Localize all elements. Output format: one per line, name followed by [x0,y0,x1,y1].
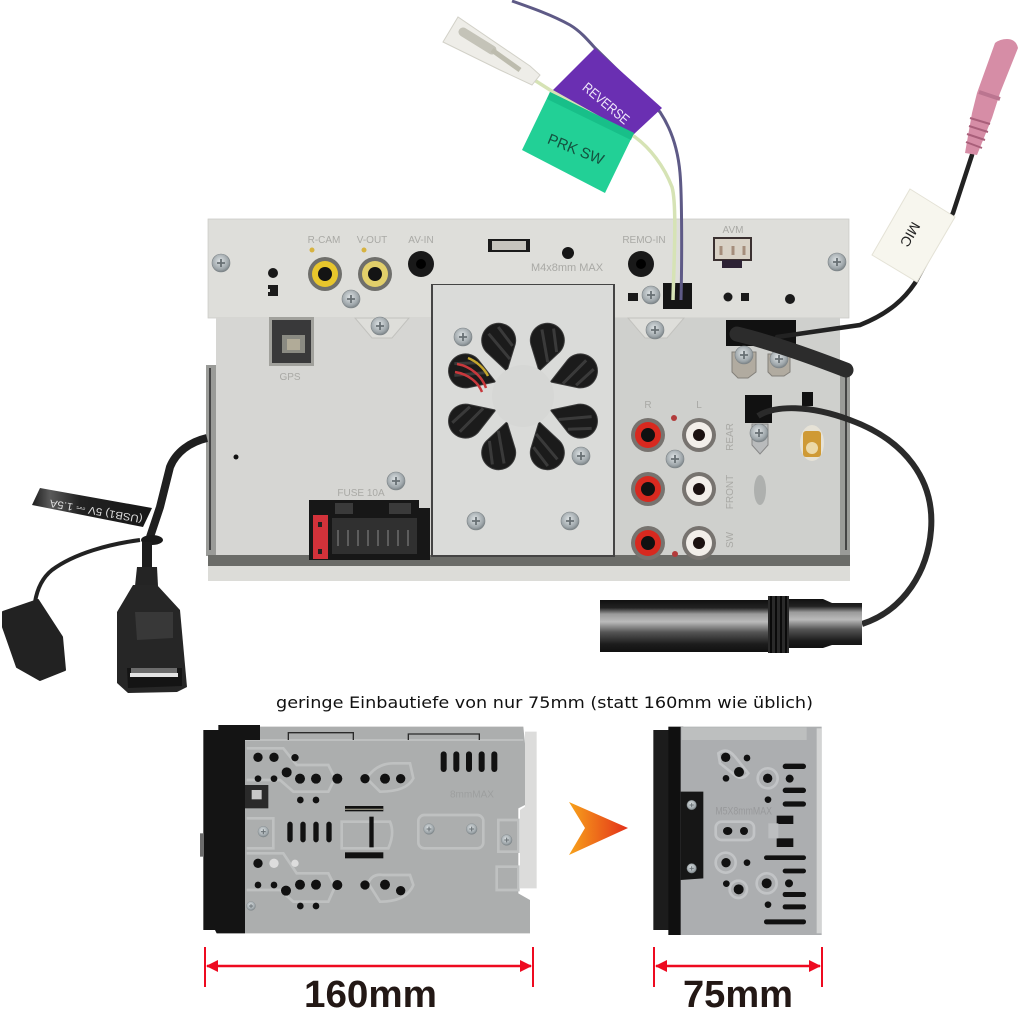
jacks [234,247,795,557]
caption: geringe Einbautiefe von nur 75mm (statt 160mm wie üblich) [276,693,813,712]
panel labels: L [696,400,702,411]
fuse and power connector [309,500,430,560]
panel labels: R [644,400,652,411]
thick stub cable [737,334,846,370]
center plate [431,284,615,557]
top plate [208,219,849,318]
panel labels: FUSE 10A [337,488,385,499]
MIC lead [777,39,1018,337]
160mm unit side view: 8mmMAX [450,789,494,800]
USB cable assembly [3,438,207,693]
slot connector [488,239,530,252]
dimension: 75mm: 75mm [683,974,793,1016]
label: REVERSE: REVERSE [580,79,633,127]
yellow RCA R-CAM [308,257,342,291]
USB strain relief [135,567,158,586]
dimension: 160mm [205,947,533,1016]
bracket tabs [355,318,684,338]
right plate [614,318,840,556]
gold antenna socket [800,425,824,461]
wire socket [628,283,692,309]
ground lugs [732,352,790,454]
bottom strip [208,555,850,581]
USB cap [3,600,65,680]
panel labels: SW [725,531,736,548]
label: PRK SW: PRK SW [545,131,607,169]
75mm unit side view [653,727,822,935]
barrel [600,596,862,653]
wires [512,1,682,300]
panel labels: GPS [279,372,301,383]
75mm unit side view: M5X8mmMAX [715,806,773,818]
dimension: 75mm [654,947,822,1016]
main unit rear panel [206,219,850,581]
pink plug [965,39,1018,155]
AVM connector [714,238,751,268]
panel labels: AV-IN [408,235,434,246]
black cable mounts [726,320,813,423]
panel labels: AVM [723,225,743,236]
antenna cable and barrel [600,408,931,653]
label: PRK SW [522,92,634,193]
USB socket [117,585,187,693]
side brackets [206,365,850,556]
top wire pair with labels [443,1,682,300]
panel labels: REMO-IN [622,235,666,246]
160mm unit side view [200,725,537,933]
USB label flag: (USB1) 5V ⎓ 1.5A [49,497,144,525]
panel labels [279,225,743,548]
white spade connector [443,17,540,85]
white RCA column [682,418,716,560]
fan vent [444,319,602,474]
left plate [216,318,433,556]
screws [212,253,846,530]
label: REVERSE [553,48,662,135]
GPS connector [269,317,314,366]
panel labels: M4x8mm MAX [531,262,604,274]
USB label flag [32,488,152,527]
panel labels: FRONT [725,475,736,509]
panel labels: V-OUT [357,235,387,246]
yellow RCA V-OUT [358,257,392,291]
label: MIC [872,189,955,282]
red RCA column [631,418,665,560]
grey oval tab [754,475,766,505]
panel labels: REAR [725,423,736,451]
panel labels: R-CAM [308,235,340,246]
dimension: 160mm: 160mm [304,974,437,1016]
label: MIC: MIC [897,219,924,250]
arrow [569,802,628,855]
